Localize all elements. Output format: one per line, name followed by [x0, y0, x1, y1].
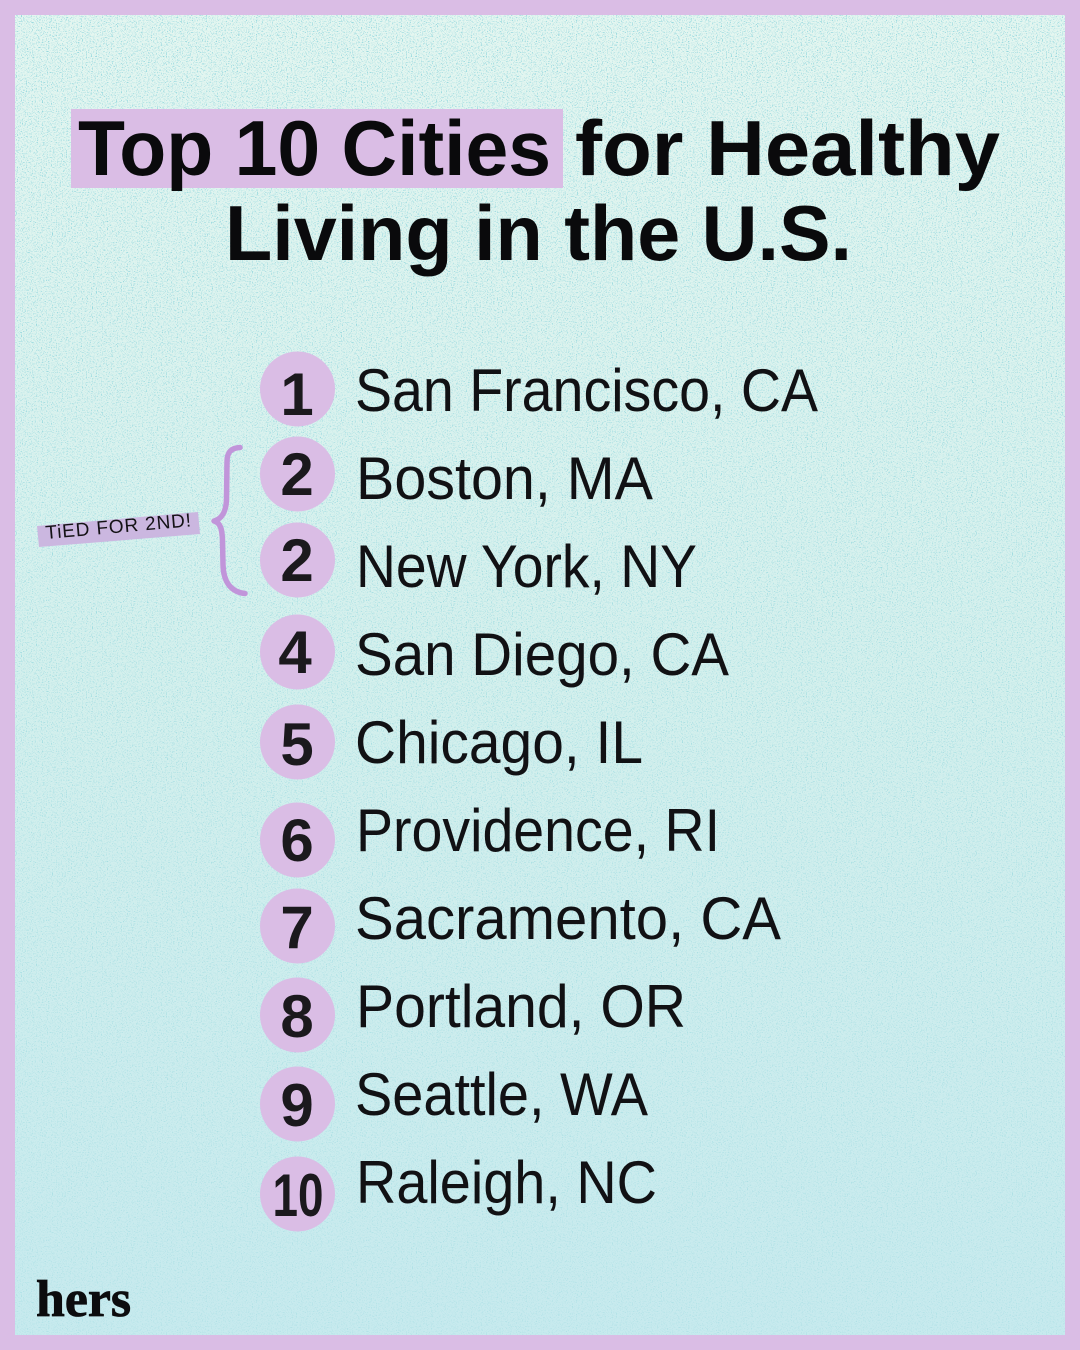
rank 5: Chicago — [260, 704, 643, 780]
rank 10: Raleigh: Raleigh, NC — [356, 1149, 657, 1216]
rank 2: Boston: 2 — [280, 441, 314, 508]
brace: tied ranks — [214, 448, 245, 594]
title line 2: Living in the U.S. — [225, 189, 852, 277]
title highlight — [71, 109, 563, 188]
logo: hers: hers — [36, 1271, 131, 1328]
rank 4: San Diego: San Diego, CA — [355, 621, 729, 688]
rank 1: San Francisco: San Francisco, CA — [355, 357, 818, 424]
rank 6: Providence: Providence, RI — [356, 797, 720, 864]
rank 4: San Diego: 4 — [278, 619, 312, 686]
title — [71, 104, 1000, 277]
rank 10: Raleigh — [260, 1149, 657, 1232]
rank 2: New York: 2 — [280, 527, 314, 594]
rank 9: Seattle: Seattle, WA — [355, 1061, 648, 1128]
rank 9: Seattle: 9 — [280, 1072, 314, 1139]
title line 1 rest: for Healthy — [575, 104, 1000, 192]
rank 7: Sacramento: Sacramento, CA — [355, 885, 781, 952]
rank 2: New York: New York, NY — [356, 533, 697, 600]
rank 2: Boston: Boston, MA — [356, 445, 653, 512]
rank 5: Chicago: 5 — [280, 711, 314, 778]
rank 1: San Francisco — [260, 352, 818, 428]
rank 6: Providence: 6 — [280, 807, 314, 874]
callout: tied for 2nd — [37, 510, 200, 547]
title line 1 highlighted: Top 10 Cities — [78, 104, 551, 192]
rank 4: San Diego — [260, 614, 729, 690]
rank 8: Portland: 8 — [280, 983, 314, 1050]
rank 1: San Francisco: 1 — [280, 361, 314, 428]
rank 2: Boston — [260, 436, 653, 512]
rank 2: New York — [260, 522, 697, 600]
rank 7: Sacramento — [260, 885, 781, 964]
rank 9: Seattle — [260, 1061, 648, 1142]
rank 7: Sacramento: 7 — [280, 894, 314, 961]
ranked list — [260, 352, 818, 1232]
rank 6: Providence — [260, 797, 720, 878]
callout text: TiED FOR 2ND! — [45, 510, 192, 544]
rank 8: Portland — [260, 973, 686, 1052]
rank 8: Portland: Portland, OR — [356, 973, 686, 1040]
callout highlight — [37, 512, 200, 547]
rank 10: Raleigh: 10 — [272, 1162, 324, 1229]
rank 5: Chicago: Chicago, IL — [355, 709, 643, 776]
